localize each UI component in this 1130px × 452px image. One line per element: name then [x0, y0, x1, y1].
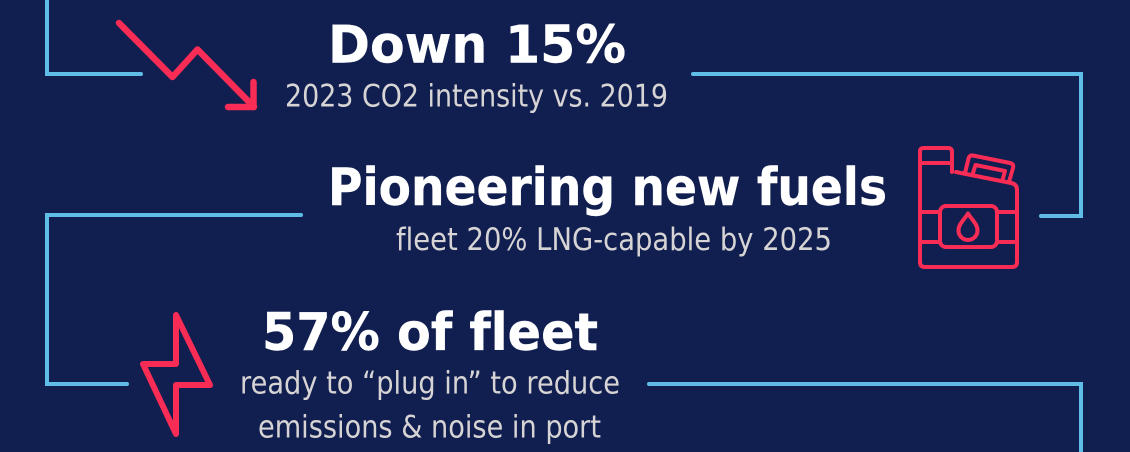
- heading: pioneering new fuels: Pioneering new fuels: [328, 158, 887, 218]
- icon: falling arrow: [119, 23, 254, 107]
- text: CO2 intensity: 2023 CO2 intensity vs. 2019: [285, 78, 668, 114]
- connector: bottom right: [649, 384, 1081, 452]
- heading: down 15%: Down 15%: [328, 16, 626, 76]
- connector: middle left to bottom: [47, 215, 301, 384]
- text: LNG capable: fleet 20% LNG-capable by 2025: [396, 222, 832, 258]
- connector: top right to middle: [693, 74, 1081, 216]
- text: plug in line one: ready to “plug in” to reduce: [240, 366, 620, 402]
- heading: 57% of fleet: 57% of fleet: [262, 303, 598, 363]
- text: plug in line two: emissions & noise in port: [258, 410, 601, 446]
- connector: top left: [47, 0, 141, 74]
- icon: lightning bolt: [143, 315, 210, 434]
- icon: fuel canister: [920, 148, 1017, 267]
